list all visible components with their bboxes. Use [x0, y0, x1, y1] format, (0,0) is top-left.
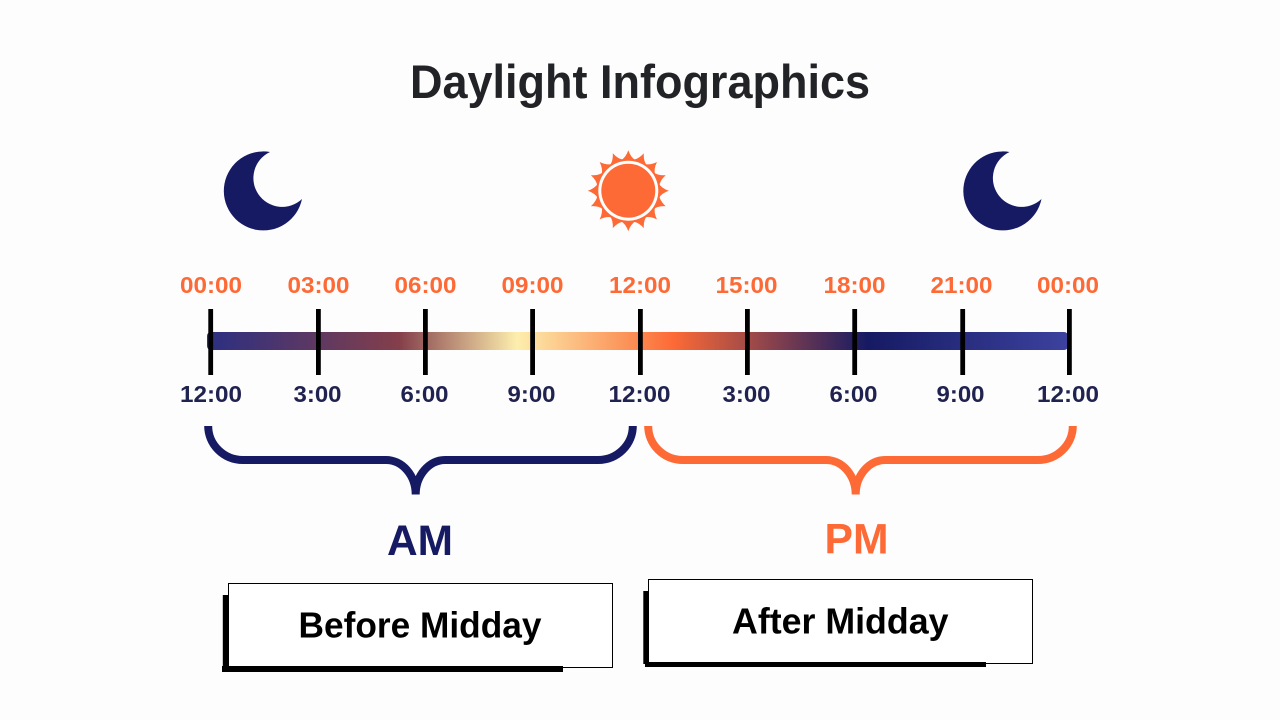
timeline gradient bar — [207, 332, 1068, 350]
12-hour time labels — [180, 381, 1099, 407]
24-hour time labels: 18:00 — [824, 272, 886, 298]
callout: before midday — [222, 584, 612, 672]
title: Daylight Infographics — [410, 55, 870, 108]
callout: after midday — [643, 580, 1032, 667]
12-hour time labels: 9:00 — [936, 381, 984, 407]
24-hour time labels: 00:00 — [1037, 272, 1099, 298]
callout: after midday: After Midday — [732, 600, 948, 642]
24-hour time labels: 12:00 — [609, 272, 671, 298]
PM label: PM — [824, 516, 888, 564]
12-hour time labels: 12:00 — [608, 381, 670, 407]
24-hour time labels: 00:00 — [180, 272, 242, 298]
12-hour time labels: 6:00 — [830, 381, 878, 407]
icon: sun — [588, 150, 669, 231]
24-hour time labels: 06:00 — [394, 272, 456, 298]
24-hour time labels — [180, 272, 1099, 298]
timeline tick marks — [208, 309, 1072, 375]
24-hour time labels: 03:00 — [288, 272, 350, 298]
AM label: AM — [387, 517, 453, 565]
PM brace — [648, 426, 1073, 494]
24-hour time labels: 21:00 — [930, 272, 992, 298]
12-hour time labels: 3:00 — [294, 381, 342, 407]
icon: left moon — [224, 151, 302, 230]
24-hour time labels: 15:00 — [716, 272, 778, 298]
icon: right moon — [963, 151, 1042, 230]
24-hour time labels: 09:00 — [502, 272, 564, 298]
12-hour time labels: 12:00 — [180, 381, 242, 407]
AM brace — [208, 426, 633, 494]
12-hour time labels: 12:00 — [1037, 381, 1099, 407]
callout: before midday: Before Midday — [298, 604, 542, 646]
12-hour time labels: 3:00 — [722, 381, 770, 407]
12-hour time labels: 9:00 — [508, 381, 556, 407]
12-hour time labels: 6:00 — [400, 381, 448, 407]
